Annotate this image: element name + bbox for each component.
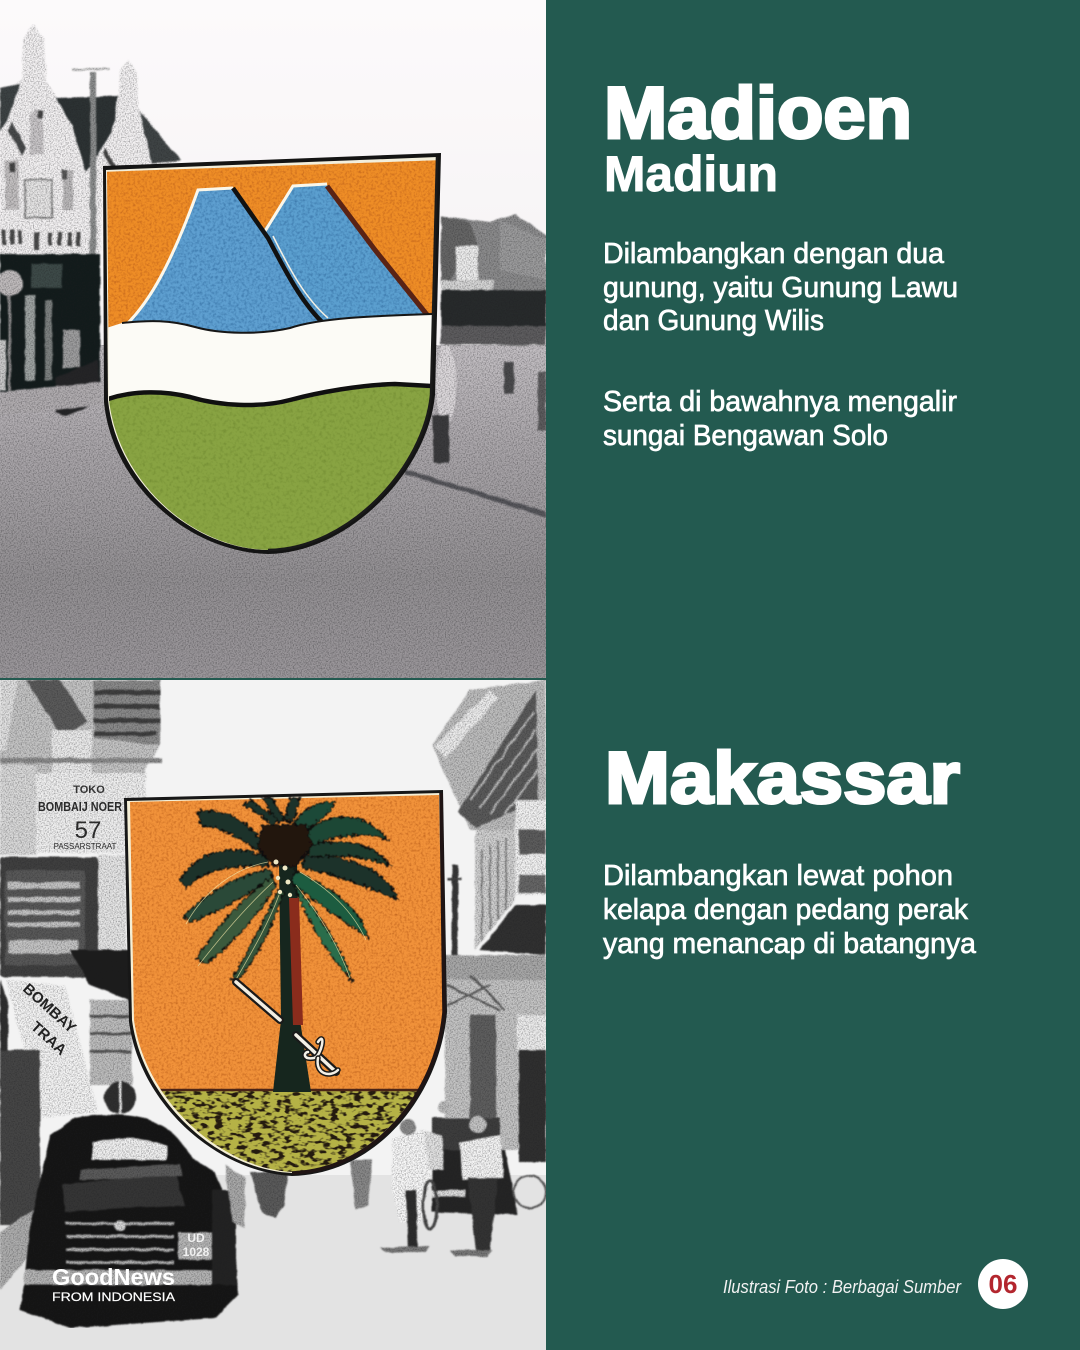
blue twin mountains <box>118 184 430 340</box>
photo: colonial street in Madiun <box>0 0 546 678</box>
licence plate <box>183 1234 209 1256</box>
text block: coconut tree <box>603 860 977 960</box>
photo: street scene in Makassar <box>0 680 546 1350</box>
text block: two mountains <box>603 238 958 337</box>
text block: coconut tree: Dilambangkan lewat pohon <box>603 860 953 892</box>
shop sign text <box>38 784 123 851</box>
page number badge <box>978 1259 1028 1309</box>
shop sign text: PASSARSTRAAT <box>54 842 117 851</box>
text block: two mountains: gunung, yaitu Gunung Lawu <box>603 272 958 304</box>
sword <box>236 982 338 1074</box>
grass ground <box>160 1088 418 1172</box>
orange field <box>125 790 450 1095</box>
logo: GoodNews from Indonesia <box>52 1264 175 1304</box>
shop sign text: 57 <box>75 817 101 844</box>
fronds <box>180 798 398 982</box>
frond highlights <box>186 862 366 983</box>
logo: GoodNews from Indonesia: FROM INDONESIA <box>52 1290 175 1304</box>
text block: river: sungai Bengawan Solo <box>603 420 888 452</box>
subheading: Madiun: Madiun <box>604 146 778 202</box>
banner text: TRAA <box>27 1018 70 1059</box>
banner text: BOMBAY <box>19 980 79 1037</box>
text block: coconut tree: yang menancap di batangnya <box>603 928 977 960</box>
shop sign text: BOMBAIJ NOER <box>38 799 123 814</box>
text block: river: Serta di bawahnya mengalir <box>603 386 957 418</box>
panel: Madioen description <box>603 73 958 452</box>
heading: Makassar: Makassar <box>605 738 960 819</box>
palm tree <box>180 798 398 1092</box>
green field <box>109 386 430 550</box>
page number badge: 06 <box>989 1269 1017 1299</box>
licence plate: 1028 <box>183 1245 210 1259</box>
crown <box>258 824 312 866</box>
text block: river <box>603 386 957 452</box>
shop sign text: TOKO <box>73 784 105 796</box>
heading: Madioen: Madioen <box>604 73 912 154</box>
panel: Makassar description <box>603 738 977 960</box>
orange sky field <box>100 160 445 345</box>
white river band <box>108 315 432 403</box>
logo: GoodNews from Indonesia: GoodNews <box>52 1264 175 1290</box>
banner text <box>22 983 78 1056</box>
coconuts <box>274 860 292 897</box>
shield: Madioen coat of arms <box>100 153 445 560</box>
photo credit: Ilustrasi Foto : Berbagai Sumber <box>723 1277 962 1297</box>
shield: Makassar coat of arms <box>124 790 450 1180</box>
licence plate: UD <box>187 1231 205 1245</box>
text block: two mountains: Dilambangkan dengan dua <box>603 238 945 270</box>
trunk <box>273 862 311 1092</box>
text block: coconut tree: kelapa dengan pedang perak <box>603 894 968 926</box>
text block: two mountains: dan Gunung Wilis <box>603 305 824 337</box>
